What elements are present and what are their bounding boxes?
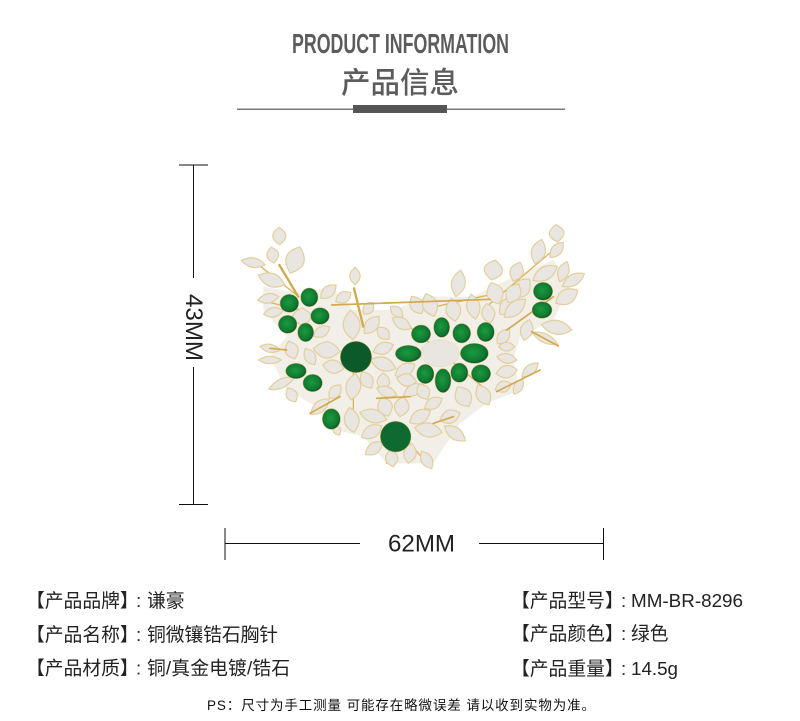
product details left column: 【产品名称】 — [26, 624, 139, 645]
width dimension — [225, 528, 604, 560]
green stones — [278, 282, 553, 452]
title divider — [237, 105, 565, 113]
title — [292, 28, 509, 102]
product details right column — [511, 590, 743, 679]
product details right column: 14.5g — [631, 658, 678, 679]
product details left column: : — [136, 624, 141, 645]
gold pin and stems — [270, 265, 558, 423]
product details left column: 【产品品牌】 — [26, 590, 139, 611]
footnote: PS：尺寸为手工测量 可能存在略微误差 请以收到实物为准。 — [207, 698, 595, 713]
product details right column: MM-BR-8296 — [631, 590, 743, 611]
product details left column: 谦豪 — [147, 590, 185, 611]
product details right column: 【产品颜色】 — [511, 623, 624, 644]
height dimension — [179, 165, 208, 504]
white stones — [241, 224, 587, 471]
product details right column: 绿色 — [631, 623, 669, 644]
product details left column: 铜/真金电镀/锆石 — [147, 658, 290, 678]
product details left column: : — [136, 590, 141, 611]
product details left column: 【产品材质】 — [26, 658, 139, 678]
product details left column — [26, 590, 290, 678]
product details right column: : — [621, 590, 626, 611]
product details right column: : — [621, 623, 626, 644]
brooch body backdrop — [263, 260, 570, 463]
product details right column: : — [621, 658, 626, 679]
height dimension: 43MM — [180, 294, 207, 361]
title: PRODUCT INFORMATION — [292, 28, 509, 59]
product details right column: 【产品重量】 — [511, 658, 624, 679]
brooch illustration — [241, 224, 587, 471]
product details right column: 【产品型号】 — [511, 590, 624, 611]
width dimension: 62MM — [388, 530, 455, 558]
gold wires — [257, 250, 553, 467]
title: 产品信息 — [341, 60, 459, 102]
product details left column: 铜微镶锆石胸针 — [147, 624, 278, 645]
product details left column: : — [136, 658, 141, 678]
